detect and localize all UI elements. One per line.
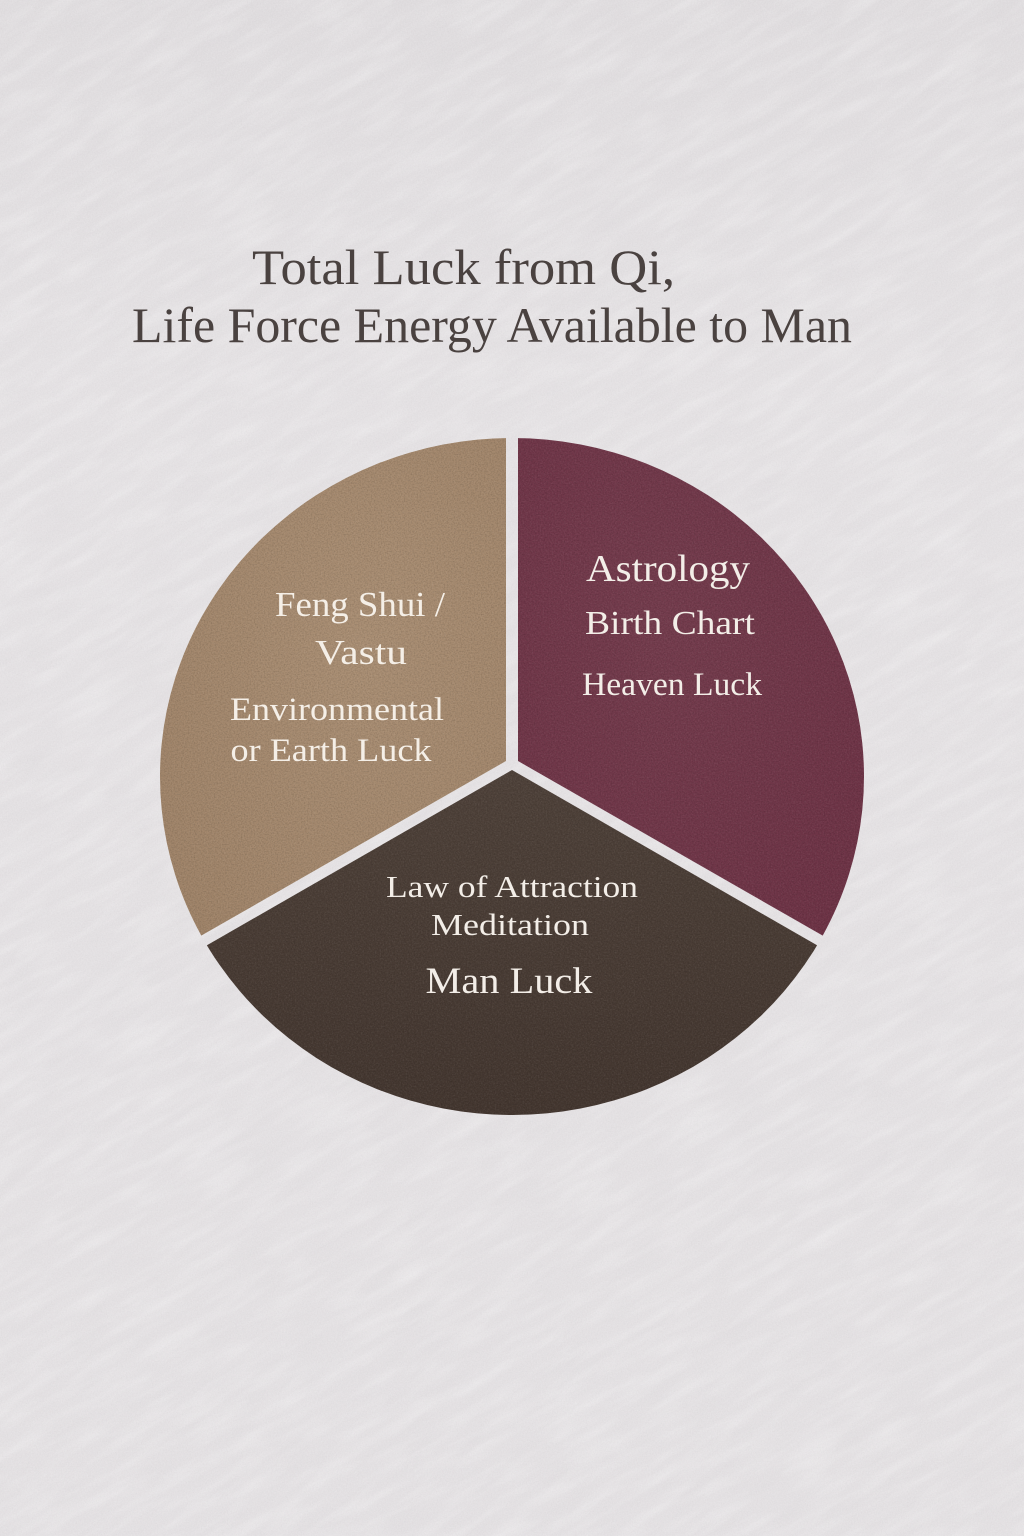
segment: Man Luck (dark brown) [206, 770, 817, 1115]
pie chart [150, 430, 874, 1125]
label: Man Luck: Meditation [431, 907, 590, 942]
label: Man Luck: Man Luck [426, 961, 593, 1002]
pie grain texture [150, 430, 874, 1125]
label: Astrology: Astrology [586, 548, 750, 590]
label: Feng Shui / Vastu: Feng Shui / [275, 585, 445, 624]
title: Life Force Energy Available to Man [132, 297, 852, 353]
segment: Astrology (maroon) [518, 430, 874, 965]
label: Man Luck: Law of Attraction [386, 869, 639, 904]
label: Astrology: Heaven Luck [582, 667, 763, 703]
label: Man Luck [386, 869, 639, 1002]
label: Feng Shui / Vastu [230, 585, 445, 769]
label: Feng Shui / Vastu: Environmental [230, 692, 444, 728]
title [132, 239, 852, 353]
title: Total Luck from Qi, [252, 239, 675, 295]
label: Astrology [582, 548, 763, 703]
label: Astrology: Birth Chart [585, 605, 756, 642]
label: Feng Shui / Vastu: Vastu [315, 633, 407, 672]
label: Feng Shui / Vastu: or Earth Luck [230, 733, 432, 769]
segment: Feng Shui / Vastu (tan) [150, 430, 506, 965]
